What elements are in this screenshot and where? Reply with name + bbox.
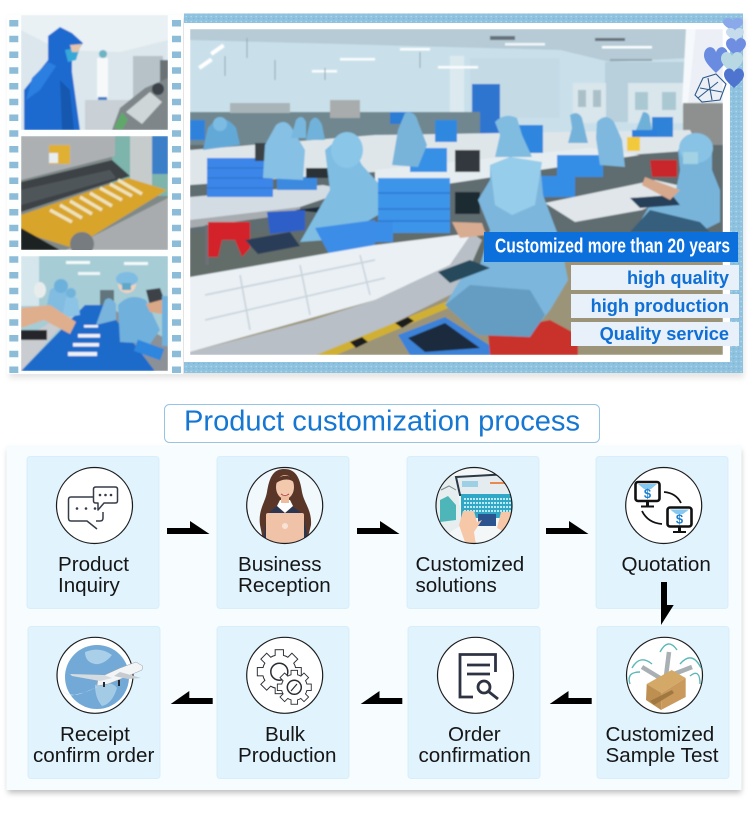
icon: drone carrying box (629, 644, 701, 710)
photo: worker in blue suit at mixing equipment (21, 15, 168, 130)
step: bulk production: Bulk (265, 723, 306, 746)
step: product inquiry: Inquiry (58, 574, 121, 597)
photo: strip packing machine with yellow plate (21, 136, 168, 256)
step: product inquiry: Product (58, 553, 129, 576)
step: customized sample test: Sample Test (606, 744, 719, 767)
step: receipt confirm order: confirm order (33, 744, 154, 767)
arrow: step 5 to 6 (550, 691, 592, 704)
film strip with three photos (7, 15, 183, 374)
step: quotation: Quotation (622, 553, 711, 576)
tag: quality service: Quality service (600, 324, 729, 344)
photo collage section (7, 14, 746, 378)
icon: globe and airplane (60, 645, 143, 709)
step: customized solutions: solutions (416, 574, 497, 597)
arrow: step 2 to 3 (357, 521, 400, 534)
step: bulk production (217, 626, 349, 778)
arrow: step 1 to 2 (167, 521, 210, 534)
tag: high production (571, 294, 739, 318)
step: product inquiry (27, 456, 159, 608)
step: business reception: Business (238, 553, 322, 576)
step: customized solutions (407, 456, 539, 608)
arrow: step 3 to 4 (546, 521, 588, 534)
step: customized sample test: Customized (606, 723, 714, 746)
blue textured frame (184, 14, 743, 373)
tag: high quality (571, 265, 739, 290)
step: business reception: Reception (238, 574, 331, 597)
photo: workers at blue conveyor (21, 256, 168, 371)
step: bulk production: Production (238, 744, 336, 767)
step: customized solutions: Customized (416, 553, 524, 576)
step: order confirmation (408, 626, 540, 778)
icon: exchanging monitors (636, 482, 692, 533)
step: receipt confirm order (28, 626, 160, 778)
heading: product customization process: Product customization process (184, 406, 580, 438)
tag: high quality: high quality (627, 268, 730, 288)
icon: exchanging monitors: $ (644, 486, 652, 501)
arrow: step 7 to 8 (171, 691, 213, 704)
icon: woman with laptop (260, 469, 311, 545)
panel: process flow (6, 445, 742, 793)
icon: hands on laptop (436, 468, 512, 543)
step: order confirmation: confirmation (418, 744, 531, 767)
tag: quality service (571, 322, 739, 346)
step: customized sample test (597, 626, 729, 778)
icon: exchanging monitors: $ (676, 512, 684, 526)
step: order confirmation: Order (448, 723, 501, 746)
step: business reception (217, 456, 349, 608)
icon: gears (258, 650, 311, 704)
step: quotation (596, 456, 728, 608)
tag: high production: high production (591, 296, 729, 316)
main photo: cleanroom factory floor (190, 29, 723, 355)
step: receipt confirm order: Receipt (60, 723, 130, 746)
arrow: step 6 to 7 (361, 691, 402, 704)
icon: blue heart balloons (695, 18, 746, 102)
icon: chat bubbles (68, 487, 118, 529)
icon: document with magnifier (460, 654, 498, 699)
arrow: step 4 down to 5 (661, 582, 674, 625)
